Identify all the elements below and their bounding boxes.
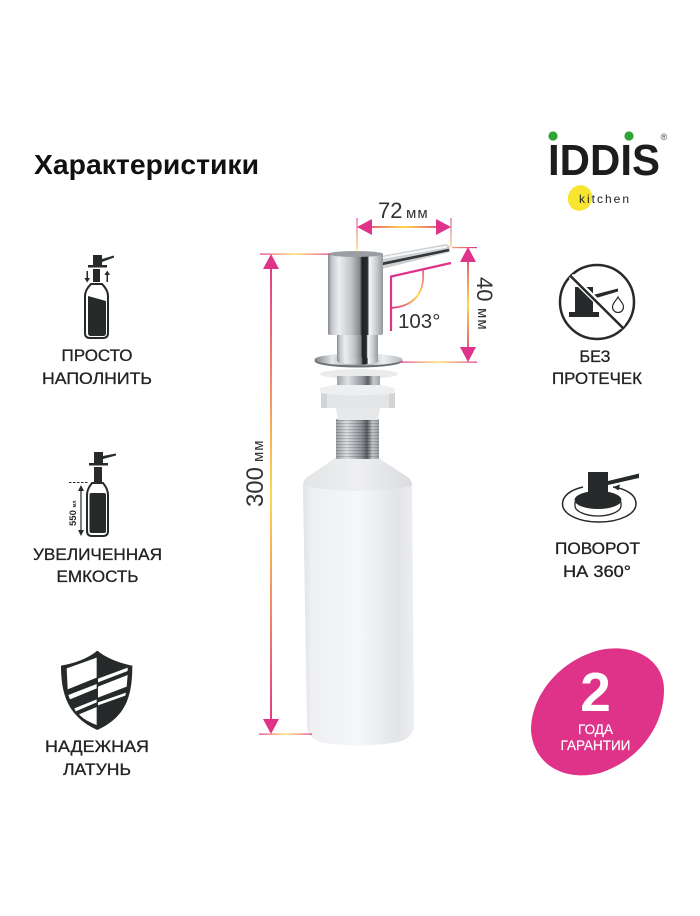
icon: 360 rotation: [562, 472, 639, 522]
icon: larger capacity bottle: [68, 452, 116, 536]
dimension: 300 mm: мм: [250, 439, 267, 462]
bottle: [303, 457, 414, 746]
chrome neck: [337, 335, 378, 364]
angle: 103 degrees: [391, 263, 451, 333]
logo green dots: [548, 131, 634, 141]
threaded shank: [336, 419, 379, 459]
dispenser product: [303, 244, 450, 746]
dimension: 72 mm: [357, 198, 451, 252]
angle: 103 degrees: 103°: [398, 310, 440, 333]
label: easy fill: НАПОЛНИТЬ: [42, 369, 152, 388]
badge text: ГОДА: [578, 722, 613, 737]
label: reliable brass: НАДЕЖНАЯ: [45, 737, 149, 756]
plastic nut: [320, 383, 395, 420]
dimension: 40 mm: [400, 247, 497, 363]
icon: no leaks: [560, 265, 634, 339]
dimension: 72 mm: мм: [406, 205, 429, 222]
logo registered mark: ®: [661, 132, 668, 142]
washer and collar: [320, 369, 398, 385]
title: Характеристики: [34, 149, 259, 180]
warranty badge: [531, 648, 664, 775]
label: 360 rotation: ПОВОРОТ: [555, 539, 640, 558]
dimension: 300 mm: 300: [242, 467, 269, 507]
label: 360 rotation: НА 360°: [563, 562, 631, 581]
label: no leaks: БЕЗ: [580, 347, 610, 366]
label: larger capacity: ЕМКОСТЬ: [56, 567, 138, 586]
icon: brass shield: [61, 651, 132, 730]
badge text: ГАРАНТИИ: [561, 738, 630, 753]
badge number: 2: [580, 661, 611, 723]
logo: IDDIS kitchen: [548, 131, 668, 215]
badge blob: [531, 648, 664, 775]
logo yellow blob: [564, 181, 596, 215]
logo wordmark: IDDIS: [548, 136, 660, 185]
label: reliable brass: ЛАТУНЬ: [63, 760, 131, 779]
dimension: 40 mm: мм: [474, 308, 491, 331]
dimension: 40 mm: 40: [472, 277, 497, 301]
chrome spout: [370, 244, 450, 271]
label: larger capacity: УВЕЛИЧЕННАЯ: [33, 545, 162, 564]
label: easy fill: ПРОСТО: [62, 346, 132, 365]
icon: larger capacity bottle: 550 мл: [68, 501, 79, 526]
dimension: 72 mm: 72: [378, 198, 402, 223]
chrome cap: [328, 251, 383, 335]
label: no leaks: ПРОТЕЧЕК: [552, 369, 642, 388]
icon: easy fill bottle: [84, 255, 114, 338]
chrome flange: [314, 354, 402, 368]
logo kitchen word: kitchen: [579, 192, 631, 206]
dimension: 300 mm: [242, 254, 330, 735]
